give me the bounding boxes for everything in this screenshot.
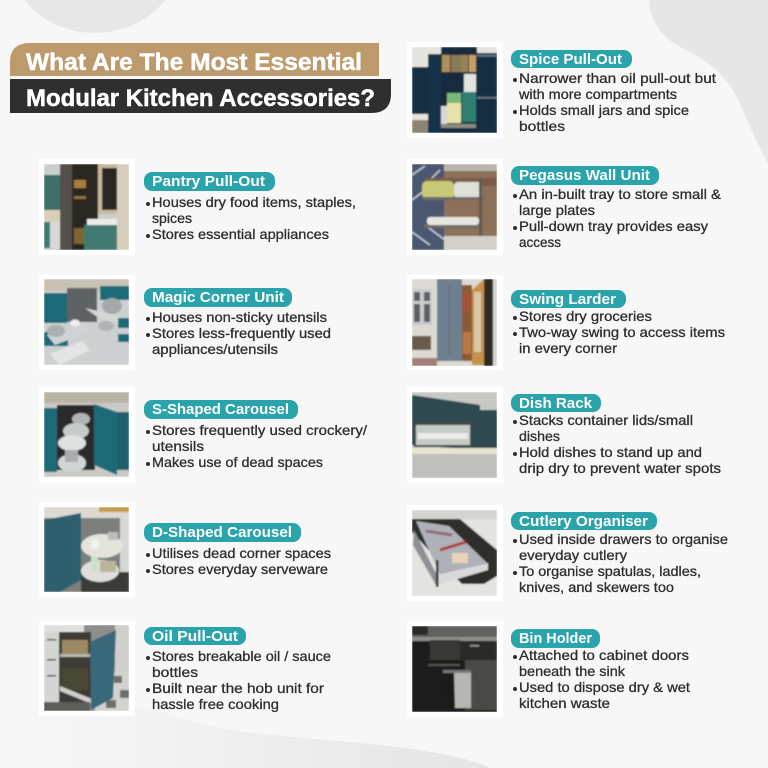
panel: D-Shaped Carousel [44, 507, 331, 592]
label: Dish Rack: Dish Rack [519, 395, 593, 412]
photo: pegasus wall unit [412, 164, 497, 250]
photo: swing larder [412, 279, 497, 366]
bullets: Pantry Pull-Out: Houses dry food items, staples, [152, 194, 356, 210]
bullets: Oil Pull-Out: Built near the hob unit for [152, 680, 324, 696]
bullets: Bin Holder: Attached to cabinet doors [519, 647, 689, 663]
panel: S-Shaped Carousel [44, 392, 368, 477]
bullets: Magic Corner Unit: appliances/utensils [152, 341, 278, 357]
label: Magic Corner Unit: Magic Corner Unit [152, 289, 284, 306]
bullets: Spice Pull-Out: Narrower than oil pull-out but [519, 70, 716, 86]
bullets: Swing Larder: Stores dry groceries [519, 308, 652, 324]
label: Spice Pull-Out: Spice Pull-Out [519, 51, 622, 68]
label: S-Shaped Carousel: S-Shaped Carousel [152, 401, 289, 418]
bullets: Dish Rack: dishes [519, 428, 560, 444]
label: D-Shaped Carousel: D-Shaped Carousel [152, 524, 292, 541]
bullets: D-Shaped Carousel [146, 545, 331, 577]
bullets: Pegasus Wall Unit: large plates [519, 202, 595, 218]
photo: cutlery organiser [412, 510, 497, 596]
bullets: Pegasus Wall Unit: An in-built tray to store small & [519, 186, 722, 202]
photo: spice pull-out [412, 47, 497, 133]
bullets: Swing Larder: in every corner [519, 340, 617, 356]
photo: bin holder [412, 626, 497, 712]
bullets: Bin Holder [513, 647, 690, 711]
background blob: top left circle [10, 0, 180, 33]
label: Oil Pull-Out: Oil Pull-Out [152, 628, 238, 645]
bullets: Dish Rack [513, 412, 721, 476]
bullets: Oil Pull-Out [146, 648, 331, 712]
bullets: Bin Holder: beneath the sink [519, 663, 626, 679]
panel: Pegasus Wall Unit [412, 164, 721, 250]
photo: pantry pull-out [44, 164, 129, 250]
bullets: Spice Pull-Out: Holds small jars and spice [519, 102, 689, 118]
panel: Pantry Pull-Out [44, 164, 355, 250]
bullets: Magic Corner Unit: Stores less-frequently used [152, 325, 331, 341]
bullets: Cutlery Organiser [513, 531, 728, 595]
label: Pegasus Wall Unit: Pegasus Wall Unit [519, 167, 650, 184]
bullets: Spice Pull-Out: with more compartments [518, 86, 677, 102]
bullets: Pantry Pull-Out [146, 194, 356, 242]
bullets: Magic Corner Unit: Houses non-sticky utensils [152, 309, 327, 325]
bullets: Dish Rack: drip dry to prevent water spots [519, 460, 721, 476]
panel: Bin Holder [412, 626, 690, 712]
title: Modular Kitchen Accessories? [26, 85, 375, 112]
bullets: Pegasus Wall Unit [513, 186, 722, 250]
bullets: Bin Holder: Used to dispose dry & wet [519, 679, 690, 695]
bullets: Swing Larder [513, 308, 725, 356]
label: Cutlery Organiser: Cutlery Organiser [519, 513, 648, 530]
panel: Spice Pull-Out [412, 47, 716, 133]
panel: Magic Corner Unit [44, 279, 330, 365]
bullets: Magic Corner Unit [146, 309, 331, 357]
bullets: Pegasus Wall Unit: access [519, 234, 561, 250]
bullets: Spice Pull-Out: bottles [519, 118, 565, 134]
bullets: S-Shaped Carousel: Stores frequently used crockery/ [152, 422, 367, 438]
bullets: Cutlery Organiser: To organise spatulas, ladles, [519, 563, 701, 579]
bullets: Dish Rack: Stacks container lids/small [519, 412, 693, 428]
bullets: Pegasus Wall Unit: Pull-down tray provides easy [519, 218, 708, 234]
bullets: Pantry Pull-Out: spices [152, 210, 192, 226]
bullets: Oil Pull-Out: bottles [152, 664, 198, 680]
panel: Dish Rack [412, 392, 721, 478]
bullets: Swing Larder: Two-way swing to access items [519, 324, 725, 340]
bullets: Bin Holder: kitchen waste [519, 695, 610, 711]
bullets: Pantry Pull-Out: Stores essential appliances [152, 226, 329, 242]
photo: dish rack [412, 392, 497, 478]
label: Bin Holder: Bin Holder [519, 630, 592, 647]
photo: d-shaped carousel [44, 507, 129, 592]
panel: Swing Larder [407, 275, 725, 370]
background blob: top right [649, 0, 768, 164]
panel: Cutlery Organiser [412, 510, 728, 596]
panel: Oil Pull-Out [39, 621, 331, 716]
label: Swing Larder: Swing Larder [519, 291, 616, 308]
bullets: Cutlery Organiser: knives, and skewers too [519, 579, 674, 595]
bullets: Cutlery Organiser: Used inside drawers to organise [519, 531, 728, 547]
bullets: D-Shaped Carousel: Utilises dead corner spaces [152, 545, 331, 561]
bullets: S-Shaped Carousel: Makes use of dead spaces [152, 454, 323, 470]
background blob: bottom wave [0, 706, 490, 768]
bullets: Spice Pull-Out [513, 70, 716, 134]
bullets: Cutlery Organiser: everyday cutlery [519, 547, 627, 563]
photo: magic corner unit [44, 279, 129, 365]
bullets: S-Shaped Carousel: utensils [152, 438, 204, 454]
bullets: D-Shaped Carousel: Stores everyday serveware [152, 561, 328, 577]
photo: s-shaped carousel [44, 392, 129, 477]
photo: oil pull-out [39, 621, 135, 716]
title [10, 43, 391, 113]
bullets: S-Shaped Carousel [146, 422, 367, 470]
bullets: Oil Pull-Out: hassle free cooking [152, 696, 279, 712]
bullets: Oil Pull-Out: Stores breakable oil / sauce [152, 648, 331, 664]
title: What Are The Most Essential [26, 49, 362, 76]
label: Pantry Pull-Out: Pantry Pull-Out [152, 173, 265, 190]
bullets: Dish Rack: Hold dishes to stand up and [519, 444, 702, 460]
